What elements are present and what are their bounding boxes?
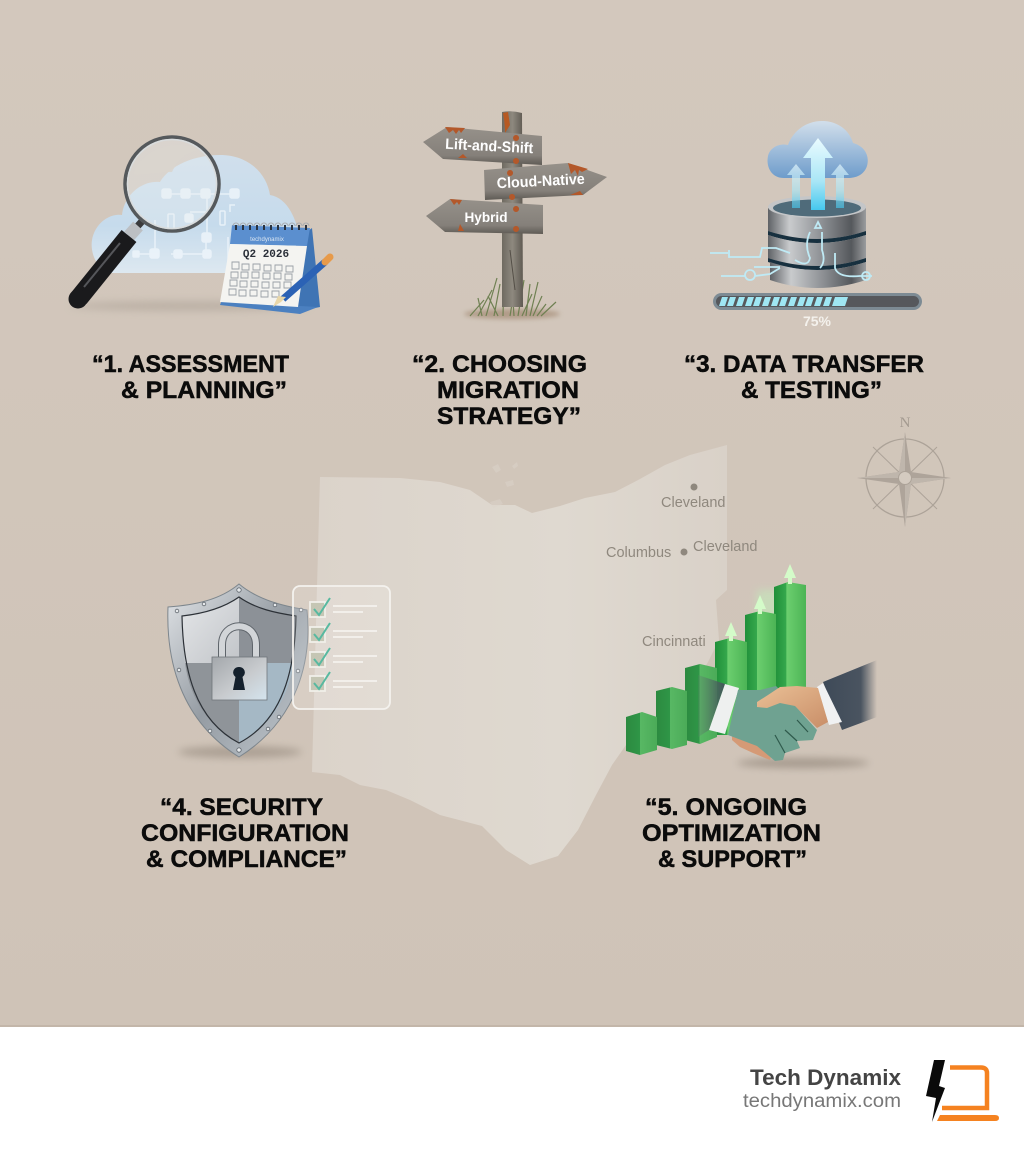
footer band bbox=[0, 1025, 1024, 1154]
calendar: techdynamix bbox=[250, 237, 284, 243]
city labels: Cleveland bbox=[661, 495, 726, 511]
compliance checklist panel bbox=[293, 586, 390, 709]
data circuit lines bbox=[710, 222, 872, 280]
heading: step 5: OPTIMIZATION bbox=[642, 820, 821, 847]
heading: step 4: “4. SECURITY bbox=[160, 794, 323, 821]
cloud network bbox=[133, 189, 239, 270]
calendar bbox=[220, 223, 330, 314]
sign: Hybrid bbox=[426, 199, 543, 234]
heading: step 3: & TESTING” bbox=[741, 377, 882, 404]
heading: step 3: “3. DATA TRANSFER bbox=[684, 351, 924, 378]
heading: step 2: MIGRATION bbox=[437, 377, 579, 404]
cloud bbox=[92, 155, 300, 273]
city labels: Columbus bbox=[606, 545, 671, 561]
heading: step 5: “5. ONGOING bbox=[645, 794, 807, 821]
calendar: Q2 2026 bbox=[243, 249, 289, 261]
green gloved hand bbox=[728, 686, 817, 761]
sign: Lift-and-Shift bbox=[423, 127, 542, 165]
icon: compass rose bbox=[857, 415, 951, 527]
growth bars bbox=[626, 564, 806, 755]
city labels: Cleveland bbox=[693, 539, 758, 555]
city labels bbox=[606, 484, 758, 650]
shield rim bbox=[168, 584, 308, 757]
heading: step 1: & PLANNING” bbox=[121, 377, 287, 404]
left sleeve bbox=[698, 675, 725, 737]
grass base bbox=[464, 276, 560, 319]
shield rivets bbox=[175, 588, 303, 752]
ground shadow bbox=[70, 301, 310, 311]
upload cloud bbox=[768, 121, 868, 178]
right suit sleeve bbox=[823, 660, 877, 730]
footer brand text: techdynamix.com bbox=[743, 1091, 901, 1112]
sign: Cloud-Native bbox=[484, 163, 607, 200]
sign: Hybrid: Hybrid bbox=[464, 209, 508, 225]
heading: step 2 bbox=[412, 351, 587, 430]
progress label: 75% bbox=[803, 313, 832, 329]
lake islands bbox=[490, 462, 518, 508]
heading: step 4 bbox=[141, 794, 349, 873]
pencil bbox=[283, 262, 325, 299]
footer brand text bbox=[743, 1065, 902, 1112]
handshake shadow bbox=[737, 758, 869, 768]
heading: step 5: & SUPPORT” bbox=[658, 846, 807, 873]
left cuff bbox=[709, 684, 739, 734]
icon: assessment cloud, magnifier and calendar bbox=[68, 137, 330, 314]
padlock bbox=[212, 626, 267, 700]
upload arrows bbox=[787, 138, 849, 210]
right cuff bbox=[817, 683, 842, 725]
icon: compass rose: N bbox=[900, 415, 911, 431]
icon: data transfer database, cloud and progress bar bbox=[710, 121, 922, 329]
icon: security shield and padlock bbox=[168, 584, 390, 758]
sign: Cloud-Native: Cloud-Native bbox=[496, 171, 585, 192]
progress bar bbox=[713, 293, 922, 310]
heading: step 2: “2. CHOOSING bbox=[412, 351, 587, 378]
heading: step 2: STRATEGY” bbox=[437, 403, 581, 430]
icon: growth bars and handshake bbox=[626, 564, 877, 768]
shield quarters bbox=[182, 597, 239, 663]
icon: signpost with three arrows bbox=[423, 111, 607, 319]
footer brand text: Tech Dynamix bbox=[750, 1065, 902, 1090]
city labels: Cincinnati bbox=[642, 634, 706, 650]
icon: Tech Dynamix logo bbox=[926, 1060, 999, 1122]
map of Ohio bbox=[312, 445, 727, 865]
sign: Lift-and-Shift: Lift-and-Shift bbox=[445, 136, 534, 157]
heading: step 4: CONFIGURATION bbox=[141, 820, 349, 847]
lower fingers of right hand bbox=[732, 735, 773, 760]
magnifying glass bbox=[68, 137, 219, 308]
heading: step 1: “1. ASSESSMENT bbox=[92, 351, 289, 378]
heading: step 5 bbox=[642, 794, 821, 873]
heading: step 4: & COMPLIANCE” bbox=[146, 846, 347, 873]
upper right hand and thumb bbox=[757, 686, 828, 728]
post bbox=[502, 111, 523, 307]
heading: step 3 bbox=[684, 351, 924, 404]
heading: step 1 bbox=[92, 351, 289, 404]
shield shadow bbox=[178, 746, 302, 758]
database cylinder bbox=[768, 196, 866, 288]
